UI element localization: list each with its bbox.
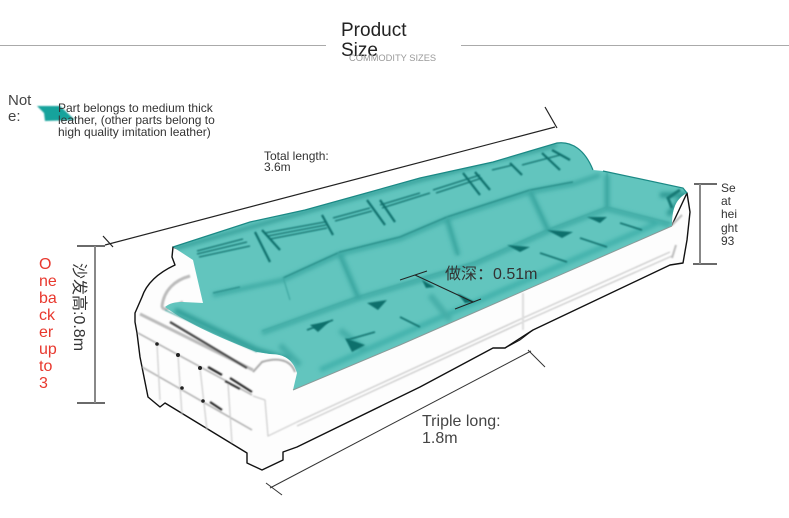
note text (58, 101, 215, 139)
red note: er (39, 324, 53, 341)
red note: to (39, 358, 52, 375)
top edge shadow (173, 143, 687, 247)
red note: up (39, 341, 57, 358)
triple length label: Triple long: (422, 413, 501, 430)
seat depth label: 做深：0.51m (445, 266, 537, 283)
sofa white body (135, 193, 690, 470)
note label (8, 92, 32, 124)
dimension: total length (103, 107, 557, 247)
upholstery soft shading (173, 145, 685, 370)
seat height label: ght (721, 221, 738, 235)
heading: Product (341, 20, 406, 41)
total length label: Total length: (264, 149, 329, 163)
heading: Size (341, 40, 378, 61)
note text: high quality imitation leather) (58, 125, 211, 139)
dimension: seat height (693, 184, 717, 264)
rear feet (505, 330, 533, 348)
total length label: 3.6m (264, 160, 291, 174)
red note: O (39, 256, 51, 273)
heading (341, 20, 406, 61)
red note: ne (39, 273, 57, 290)
sofa arm and base details (138, 215, 682, 443)
teal upholstery (165, 143, 687, 390)
side tuft dots (155, 342, 205, 403)
seat tufts (310, 217, 607, 352)
seat height label: Se (721, 181, 736, 195)
note label: e: (8, 108, 21, 124)
sofa (135, 143, 690, 470)
note swatch (37, 106, 75, 121)
seat height label (721, 181, 738, 248)
red note: ck (39, 307, 55, 324)
red note: 3 (39, 375, 48, 392)
text: 沙发高:0.8m (70, 263, 87, 351)
note text: leather, (other parts belong to (58, 113, 215, 127)
total length label (264, 149, 329, 174)
triple length label: 1.8m (422, 430, 458, 446)
upholstery seams and tufts (165, 150, 680, 352)
red note (39, 256, 57, 392)
header rule right (461, 45, 789, 46)
seat height label: hei (721, 207, 737, 221)
dimension: triple length (266, 350, 545, 495)
seat height label: 93 (721, 234, 734, 248)
note label: Not (8, 92, 31, 109)
triple length label (422, 413, 501, 446)
seat height label: at (721, 194, 731, 208)
note text: Part belongs to medium thick (58, 101, 213, 115)
red note: ba (39, 290, 57, 307)
subheading: COMMODITY SIZES (349, 53, 436, 63)
dimension: seat depth (400, 271, 481, 309)
seat front edge (293, 226, 672, 390)
dimension: sofa height (77, 246, 105, 403)
header rule left (0, 45, 326, 46)
